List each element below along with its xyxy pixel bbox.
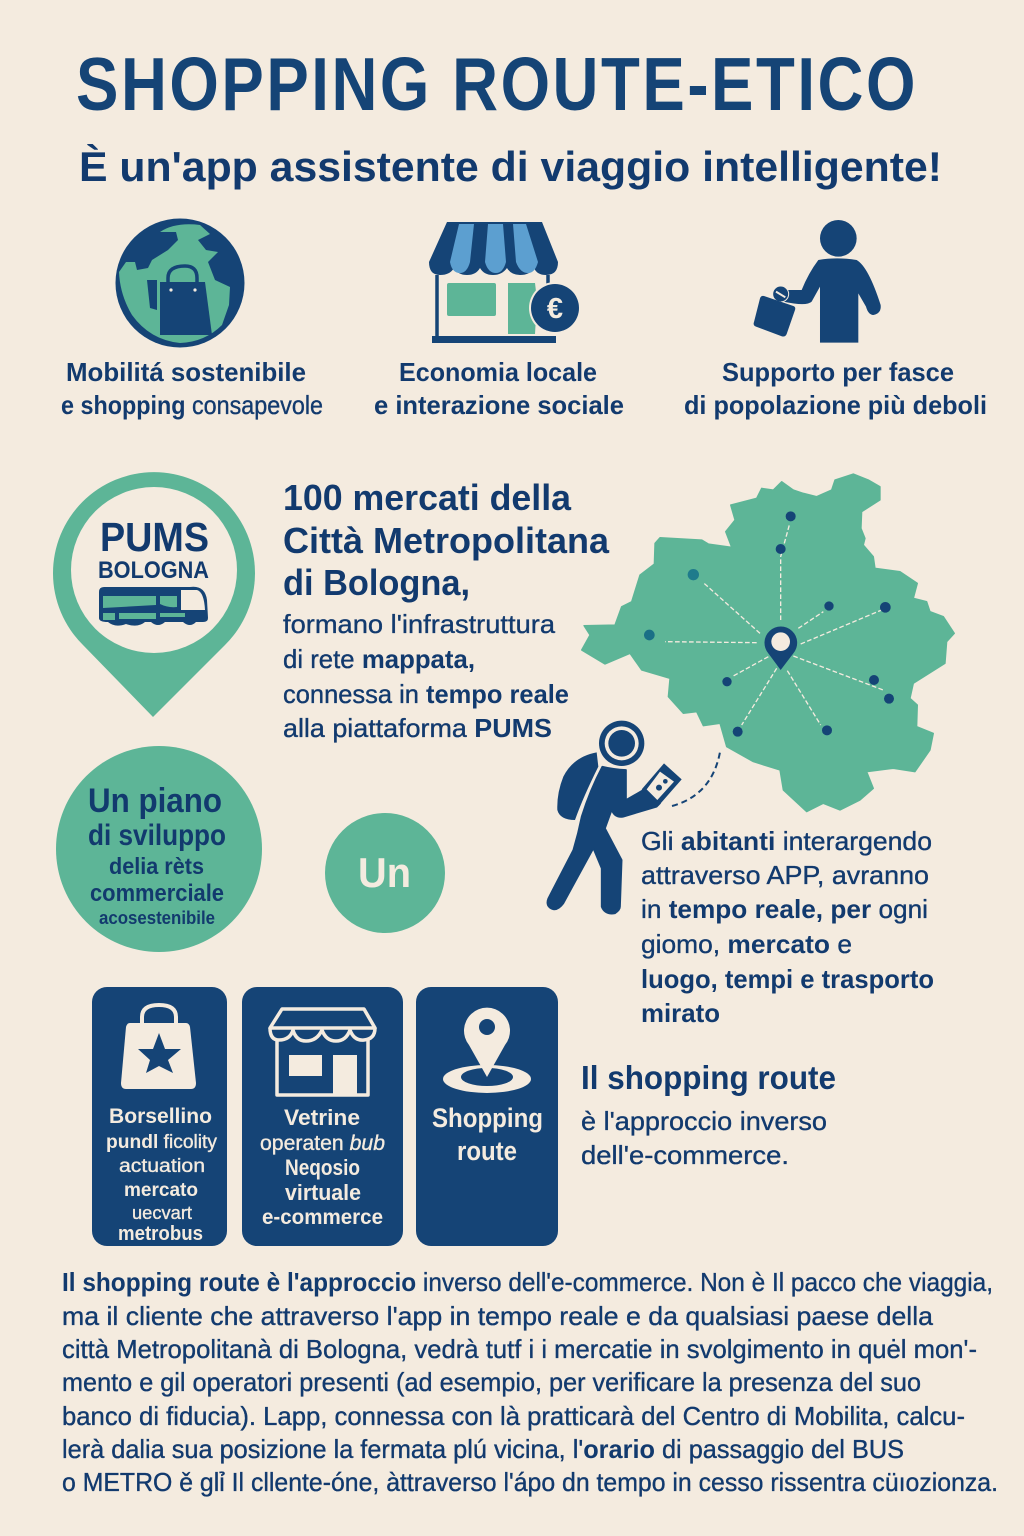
text block: inhabitants: attraverso APP, avranno xyxy=(641,860,929,890)
PUMS Bologna location pin: BOLOGNA xyxy=(98,557,209,584)
icon: person with bag xyxy=(754,220,881,343)
icon: storefront outline xyxy=(270,1009,375,1095)
map connection lines xyxy=(665,525,885,725)
card: Shopping route: Shopping xyxy=(432,1103,543,1133)
label: support for vulnerable people xyxy=(684,357,987,420)
label: sustainable mobility: e shopping consapevole xyxy=(61,390,323,420)
text block: bottom paragraph: lerà dalia sua posizione la fermata plú vicina, l'orario di passaggio del BUS xyxy=(62,1434,904,1464)
card: Shopping route: route xyxy=(457,1136,517,1166)
text block: 100 markets: di Bologna, xyxy=(283,562,470,603)
text block: 100 markets xyxy=(283,477,610,743)
label: support for vulnerable people: Supporto per fasce xyxy=(722,357,954,387)
text block: bottom paragraph: o METRO ě glỉ Il cllente-óne, àttraverso l'ápo dn tempo in cesso rissentra cüıozionza. xyxy=(62,1467,998,1497)
text block: shopping route xyxy=(581,1059,836,1170)
card: Vetrine: e-commerce xyxy=(262,1206,383,1229)
label: local economy: e interazione sociale xyxy=(374,390,624,420)
card: Vetrine: Vetrine xyxy=(284,1105,360,1130)
PUMS Bologna location pin xyxy=(53,472,255,717)
map: Metropolitan City of Bologna xyxy=(582,474,954,812)
icon: walking person with phone xyxy=(547,721,682,914)
green circle: development plan: Un piano xyxy=(88,782,222,820)
PUMS Bologna location pin: PUMS xyxy=(100,514,209,560)
text block: shopping route: dell'e-commerce. xyxy=(581,1140,789,1170)
text block: bottom paragraph: mento e gil operatori presenti (ad esempio, per verificare la presenza del suo xyxy=(62,1367,921,1397)
label: support for vulnerable people: di popolazione più deboli xyxy=(684,390,987,420)
green circle: Un xyxy=(325,813,445,933)
label: local economy: Economia locale xyxy=(399,357,597,387)
text block: 100 markets: 100 mercati della xyxy=(283,477,572,518)
text block: bottom paragraph: banco di fiducia). Lapp, connessa con là pratticarà del Centro di Mobilita, calcu- xyxy=(62,1401,965,1431)
card: Borsellino: mercato xyxy=(124,1180,198,1201)
icon: local shop with euro xyxy=(429,222,581,343)
card: Borsellino: uecvart xyxy=(132,1203,192,1223)
icon: location pin on ground xyxy=(443,1008,531,1093)
text block: inhabitants: giomo, mercato e xyxy=(641,929,852,959)
icon: globe with shopping bag xyxy=(116,218,244,348)
card: Vetrine: virtuale xyxy=(285,1180,361,1205)
icon: bus xyxy=(99,587,208,626)
text block: inhabitants xyxy=(641,826,934,1028)
card: Borsellino: Borsellino xyxy=(109,1105,212,1128)
card: Borsellino: pundl ficolity xyxy=(106,1132,217,1153)
text block: 100 markets: di rete mappata, xyxy=(283,644,475,674)
text block: 100 markets: Città Metropolitana xyxy=(283,520,610,561)
map central pin xyxy=(764,626,797,670)
text block: bottom paragraph: ma il cliente che attraverso l'app in tempo reale e da qualsiasi paese della xyxy=(62,1301,934,1331)
green circle: development plan: commerciale xyxy=(90,880,224,907)
label: sustainable mobility xyxy=(61,357,323,420)
text block: 100 markets: connessa in tempo reale xyxy=(283,679,569,709)
card: Shopping route xyxy=(416,987,558,1246)
icon: local shop with euro: € xyxy=(547,293,563,325)
card: Vetrine xyxy=(242,987,403,1246)
text block: bottom paragraph: Il shopping route è l'approccio inverso dell'e-commerce. Non è Il pacco che viaggia, xyxy=(62,1267,993,1297)
green circle: development plan: delia rèts xyxy=(109,853,204,879)
text block: bottom paragraph xyxy=(62,1267,998,1497)
text block: inhabitants: in tempo reale, per ogni xyxy=(641,894,928,924)
text block: shopping route: Il shopping route xyxy=(581,1059,836,1096)
green circle: development plan: acosestenibile xyxy=(99,908,215,928)
green circle: development plan: di sviluppo xyxy=(88,819,226,852)
text block: shopping route: è l'approccio inverso xyxy=(581,1106,827,1136)
green circle: development plan xyxy=(56,746,262,952)
dashed link from phone to map xyxy=(672,752,720,806)
card: Borsellino: metrobus xyxy=(118,1223,203,1245)
text block: inhabitants: luogo, tempi e trasporto xyxy=(641,964,934,994)
text block: inhabitants: Gli abitanti interargendo xyxy=(641,826,932,856)
map market dots xyxy=(644,511,894,737)
text block: bottom paragraph: città Metropolitanà di Bologna, vedrà tutf i i mercatie in svolgimento in quėl mon'- xyxy=(62,1334,977,1364)
text block: 100 markets: alla piattaforma PUMS xyxy=(283,713,552,743)
green circle: Un: Un xyxy=(358,849,411,896)
card: Vetrine: Neqosio xyxy=(285,1155,360,1180)
label: sustainable mobility: Mobilitá sostenibile xyxy=(66,357,306,387)
card: Borsellino: actuation xyxy=(119,1156,205,1177)
subtitle: È un'app assistente di viaggio intelligente! xyxy=(79,143,942,190)
text block: inhabitants: mirato xyxy=(641,998,720,1028)
icon: bag with star xyxy=(121,1005,196,1089)
card: Vetrine: operaten bub xyxy=(260,1132,385,1155)
label: local economy xyxy=(374,357,624,420)
text block: 100 markets: formano l'infrastruttura xyxy=(283,609,556,639)
card: Borsellino xyxy=(92,987,227,1246)
